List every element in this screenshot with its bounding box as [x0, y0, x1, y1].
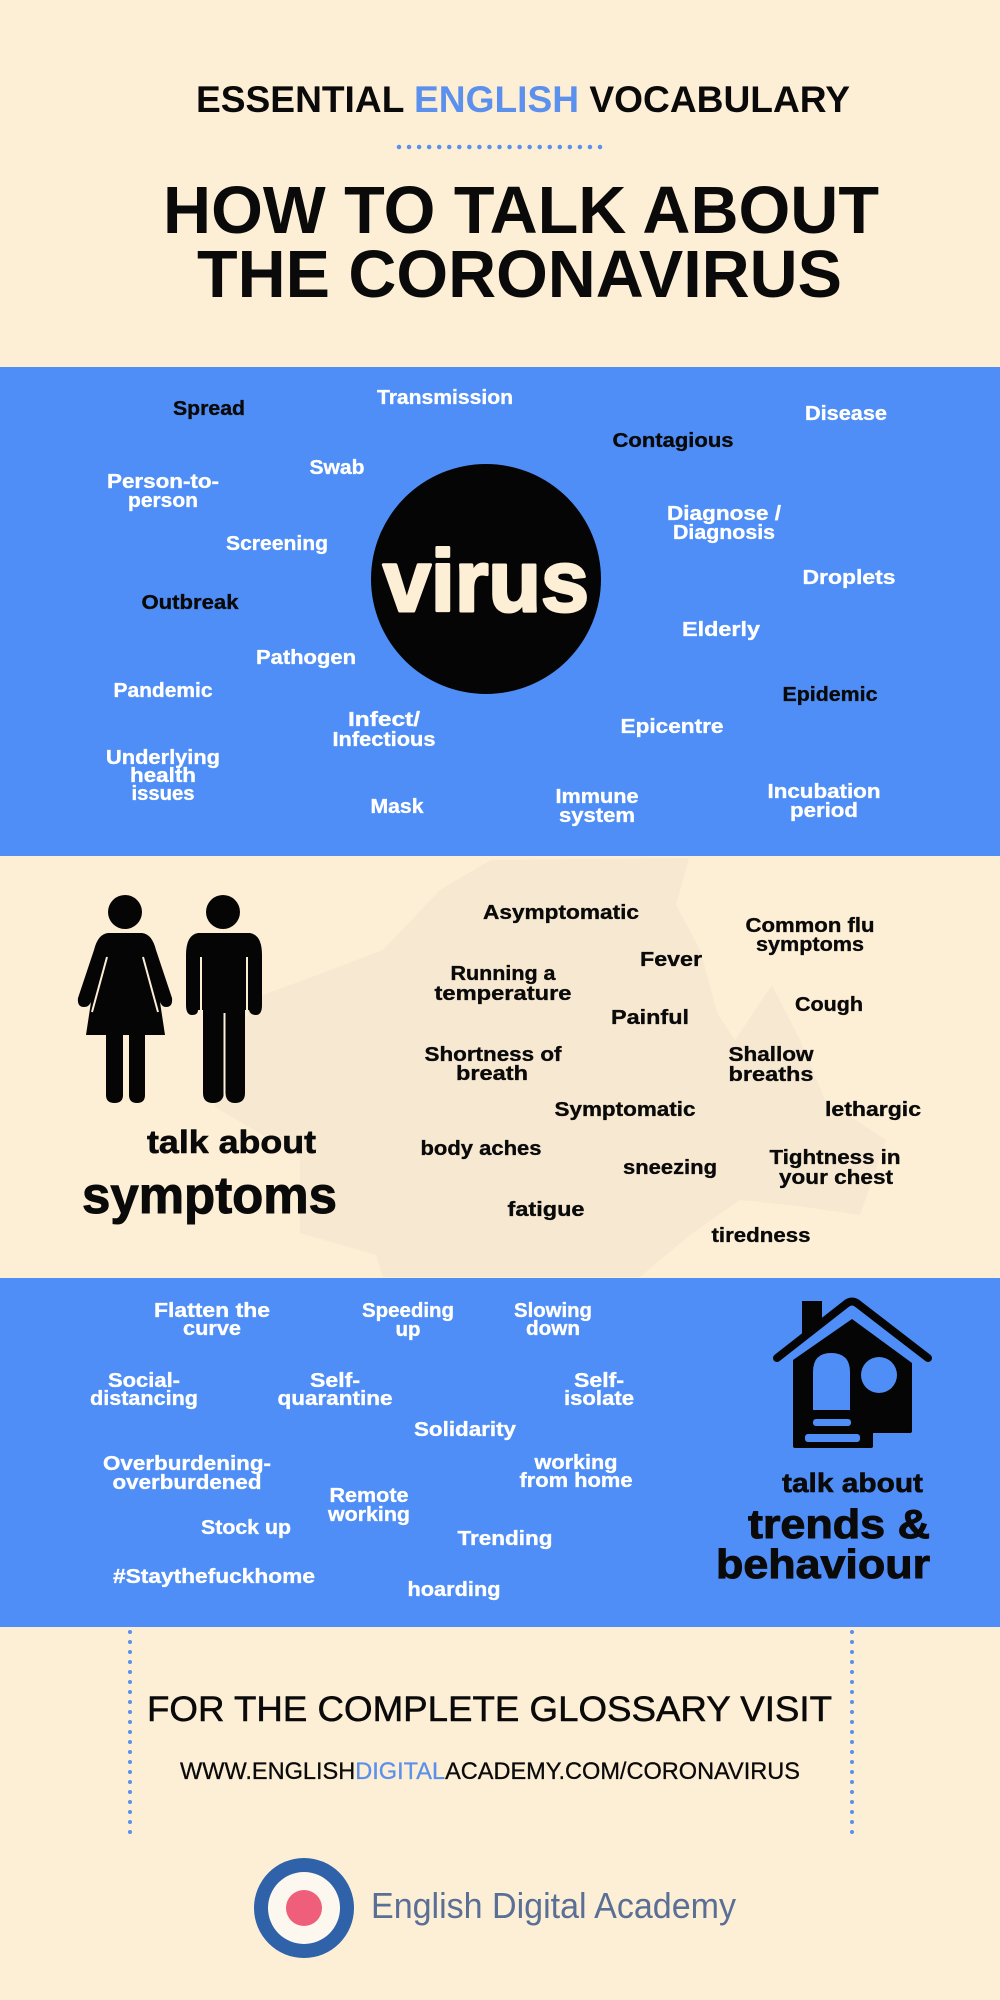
word cloud: trends: down [526, 1318, 580, 1340]
word cloud: symptoms: Shortness of [424, 1044, 562, 1066]
word cloud: virus terms: Screening [226, 533, 328, 555]
word cloud: virus terms: Incubation [768, 781, 880, 803]
word cloud: trends [90, 1300, 634, 1601]
word cloud: trends: distancing [90, 1388, 198, 1410]
icon: woman and man figures [78, 895, 262, 1103]
word cloud: trends: Stock up [201, 1517, 291, 1539]
background map silhouette [215, 858, 886, 1277]
icon: man [186, 895, 262, 1103]
word cloud: trends: curve [183, 1318, 241, 1340]
word cloud: symptoms: Symptomatic [554, 1099, 696, 1121]
word cloud: trends: quarantine [278, 1388, 392, 1410]
panel: virus vocabulary [0, 367, 1000, 856]
word cloud: virus terms: Mask [370, 796, 424, 818]
word cloud: virus terms: Infect/ [348, 709, 421, 731]
word cloud: virus terms: Pathogen [256, 647, 356, 669]
word cloud: symptoms: Common flu [746, 915, 874, 937]
word cloud: trends: from home [520, 1470, 632, 1492]
icon: house [777, 1301, 928, 1448]
heading [163, 173, 879, 312]
word cloud: symptoms: Asymptomatic [483, 902, 639, 924]
word cloud: symptoms: temperature [434, 983, 572, 1005]
heading: talk about trends and behaviour: behaviour [716, 1541, 930, 1587]
word cloud: virus terms: period [790, 800, 858, 822]
word cloud: trends: Remote [330, 1485, 408, 1507]
icon: woman [78, 895, 172, 1103]
heading: talk about symptoms [82, 1124, 337, 1225]
word cloud: symptoms: your chest [779, 1167, 893, 1189]
word cloud: virus terms: Underlying [106, 747, 220, 769]
word cloud: trends: Solidarity [414, 1419, 517, 1441]
title block [163, 79, 879, 312]
word cloud: trends: #Staythefuckhome [113, 1566, 315, 1588]
word cloud: virus terms [106, 387, 896, 827]
panel: symptoms [78, 895, 921, 1247]
word cloud: symptoms: Tightness in [770, 1147, 900, 1169]
word cloud: virus terms: system [559, 805, 635, 827]
word cloud: virus terms: Infectious [332, 729, 436, 751]
heading: THE CORONAVIRUS [197, 237, 842, 312]
word cloud: trends: Speeding [362, 1300, 454, 1322]
word cloud: symptoms: breaths [728, 1064, 814, 1086]
heading: HOW TO TALK ABOUT [163, 173, 879, 248]
word cloud: symptoms: Running a [450, 963, 556, 985]
word cloud: symptoms: Shallow [728, 1044, 814, 1066]
word cloud: highlighted virus terms: Contagious [612, 430, 734, 452]
heading: talk about trends and behaviour: trends & [748, 1501, 930, 1547]
panel: trends and behaviour [0, 1278, 1000, 1627]
word cloud: trends: working [327, 1504, 410, 1526]
word cloud: trends: hoarding [408, 1579, 500, 1601]
word cloud: trends: working [533, 1452, 618, 1474]
word cloud: virus terms: Elderly [682, 619, 761, 641]
word cloud: trends: Slowing [514, 1300, 592, 1322]
word cloud: virus terms: Disease [805, 403, 887, 425]
word cloud: trends: Self- [574, 1370, 624, 1392]
word cloud: symptoms: breath [456, 1063, 528, 1085]
word cloud: virus terms: Droplets [802, 567, 896, 589]
word cloud: symptoms: Cough [795, 994, 863, 1016]
word cloud: symptoms [420, 902, 921, 1247]
word cloud: virus terms: Epicentre [620, 716, 724, 738]
word cloud: virus terms: Transmission [377, 387, 513, 409]
word cloud: symptoms: Painful [611, 1007, 689, 1029]
heading: talk about symptoms: symptoms [82, 1167, 337, 1225]
word cloud: symptoms: sneezing [623, 1157, 717, 1179]
word cloud: virus terms: Diagnose / [667, 503, 781, 525]
icon: roundel [254, 1858, 354, 1958]
heading: talk about trends and behaviour: talk about [782, 1468, 923, 1498]
word cloud: trends: Overburdening- [103, 1453, 271, 1475]
word cloud: trends: overburdened [112, 1472, 262, 1494]
word cloud: symptoms: lethargic [825, 1099, 921, 1121]
word cloud: virus terms: health [130, 765, 196, 787]
word cloud: trends: Flatten the [154, 1300, 270, 1322]
virus badge: virus [383, 533, 589, 630]
word cloud: trends: up [396, 1319, 420, 1341]
heading: talk about symptoms: talk about [147, 1124, 316, 1160]
virus badge [371, 464, 601, 694]
word cloud: highlighted virus terms: Spread [173, 398, 245, 420]
word cloud: symptoms: Fever [640, 949, 702, 971]
logo: English Digital Academy [254, 1858, 736, 1958]
word cloud: trends: isolate [564, 1388, 634, 1410]
word cloud: highlighted virus terms: Outbreak [142, 592, 239, 614]
word cloud: virus terms: issues [132, 783, 194, 805]
word cloud: symptoms: tiredness [712, 1225, 810, 1247]
brand name: English Digital Academy [371, 1885, 736, 1926]
word cloud: virus terms: Swab [310, 457, 364, 479]
word cloud: symptoms: symptoms [756, 934, 864, 956]
word cloud: highlighted virus terms [142, 398, 878, 706]
heading: talk about trends and behaviour [716, 1468, 930, 1587]
word cloud: virus terms: person [128, 490, 198, 512]
word cloud: virus terms: Immune [556, 786, 638, 808]
word cloud: virus terms: Diagnosis [673, 522, 775, 544]
word cloud: virus terms: Pandemic [114, 680, 212, 702]
word cloud: symptoms: body aches [420, 1138, 542, 1160]
word cloud: virus terms: Person-to- [107, 471, 219, 493]
word cloud: highlighted virus terms: Epidemic [782, 684, 878, 706]
subtitle: ESSENTIAL ENGLISH VOCABULARY [196, 79, 850, 120]
word cloud: trends: Social- [108, 1370, 180, 1392]
call to action: FOR THE COMPLETE GLOSSARY VISIT [147, 1690, 832, 1729]
word cloud: trends: Trending [458, 1528, 552, 1550]
website link: WWW.ENGLISHDIGITALACADEMY.COM/CORONAVIRUS [180, 1758, 800, 1785]
word cloud: trends: Self- [310, 1370, 360, 1392]
word cloud: symptoms: fatigue [508, 1199, 584, 1221]
